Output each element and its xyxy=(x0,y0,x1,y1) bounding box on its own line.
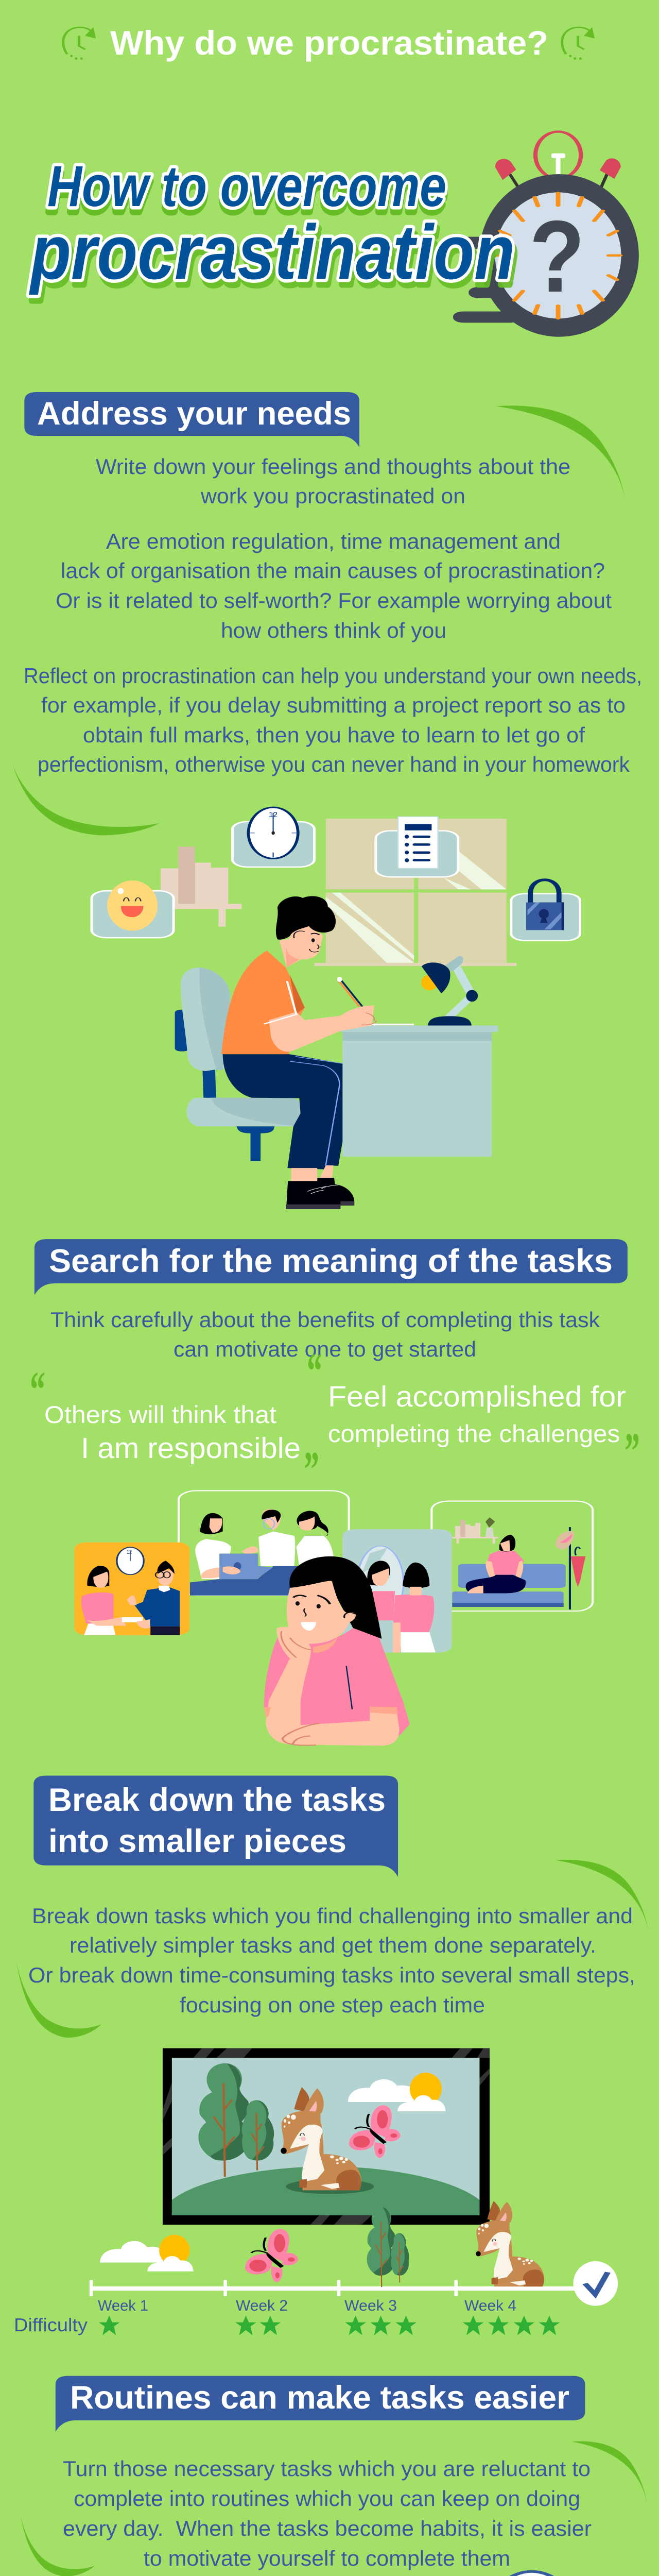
illustration: boy at desk with thoughts xyxy=(12,765,580,1209)
section: routines xyxy=(20,2376,647,2576)
bookshelf xyxy=(161,846,241,927)
heading: break down the tasks xyxy=(48,1782,386,1859)
card: happy emoji xyxy=(92,880,174,938)
quote: others will think: I am responsible xyxy=(81,1432,301,1465)
title: how to overcome procrastination: procrastination xyxy=(29,209,515,295)
text block: address needs paragraphs: obtain full marks, then you have to learn to let go of xyxy=(83,723,585,747)
swoosh: routines left xyxy=(20,2515,95,2576)
card: clock xyxy=(232,807,315,867)
swoosh: top right xyxy=(496,405,625,499)
difficulty stars xyxy=(99,2316,560,2335)
text block: address needs paragraphs: work you procrastinated on xyxy=(200,484,465,508)
text block: address needs paragraphs: lack of organisation the main causes of procrastination? xyxy=(61,558,605,583)
title: how to overcome procrastination: How to overcome xyxy=(47,154,446,218)
heading bubble: break down xyxy=(33,1775,398,1877)
title: how to overcome procrastination xyxy=(29,154,517,301)
header: why do we procrastinate xyxy=(63,24,595,62)
icon: completed check xyxy=(573,2261,618,2306)
quote: feel accomplished: “ xyxy=(307,1342,322,1399)
text block: routines body: every day. When the tasks become habits, it is easier xyxy=(63,2516,592,2540)
heading: why do we procrastinate: Why do we procrastinate? xyxy=(110,24,548,62)
text block: address needs paragraphs: perfectionism, otherwise you can never hand in your homework xyxy=(38,752,630,776)
icon: right timer xyxy=(562,27,595,60)
text block: address needs paragraphs xyxy=(24,454,642,776)
text block: break down body: relatively simpler tasks and get them done separately. xyxy=(70,1933,596,1957)
text block: address needs paragraphs: Write down your feelings and thoughts about the xyxy=(96,454,570,479)
frame: students with laptop xyxy=(179,1490,349,1596)
heading: routines: Routines can make tasks easier xyxy=(70,2380,569,2416)
card: document xyxy=(376,817,458,877)
boy xyxy=(221,896,376,1209)
text block: search body xyxy=(50,1308,600,1361)
title: how to overcome procrastination: How to overcome xyxy=(47,160,446,224)
heading bubble: address your needs xyxy=(24,392,359,447)
quote: others will think: “ xyxy=(30,1361,45,1418)
quote: feel accomplished: Feel accomplished for xyxy=(328,1380,626,1413)
quote: feel accomplished: ” xyxy=(625,1422,640,1480)
quote: feel accomplished xyxy=(307,1342,640,1480)
lamp xyxy=(421,956,478,1026)
text block: address needs paragraphs: Are emotion regulation, time management and xyxy=(106,529,561,553)
timeline labels xyxy=(14,2297,516,2335)
text block: address needs paragraphs: how others think of you xyxy=(221,618,446,642)
illustration: painting and timeline xyxy=(14,2048,618,2335)
section: address your needs xyxy=(24,392,642,776)
heading: address your needs: Address your needs xyxy=(37,396,351,432)
text block: address needs paragraphs: Or is it related to self-worth? For example worrying about xyxy=(56,588,612,613)
heading: break down the tasks: into smaller pieces xyxy=(48,1823,346,1859)
text block: address needs paragraphs: Reflect on procrastination can help you understand your own needs, xyxy=(24,664,642,688)
quote: others will think: Others will think that xyxy=(44,1401,276,1428)
text block: break down body: Break down tasks which you find challenging into smaller and xyxy=(32,1904,633,1928)
timeline labels: Week 3 xyxy=(344,2297,397,2314)
timeline labels: Week 2 xyxy=(236,2297,288,2314)
text block: routines body: Turn those necessary tasks which you are reluctant to xyxy=(63,2456,591,2481)
text block: search body: can motivate one to get started xyxy=(174,1337,476,1361)
swoosh: routines right xyxy=(571,2441,647,2505)
timeline pieces xyxy=(90,2201,581,2296)
quote: others will think: ” xyxy=(304,1441,319,1498)
timeline labels: Week 1 xyxy=(98,2297,148,2314)
heading: break down the tasks: Break down the tasks xyxy=(48,1782,386,1818)
icon: stopwatch with question mark: ? xyxy=(529,199,585,313)
icon: stopwatch with question mark xyxy=(453,131,639,337)
illustration: boy at desk with thoughts: 12 xyxy=(269,810,278,819)
card: lock xyxy=(511,880,580,941)
wall clock xyxy=(489,2571,574,2576)
swoosh: lower left xyxy=(12,765,160,835)
card: mirror with girl xyxy=(342,1529,452,1652)
text block: break down body: focusing on one step each time xyxy=(180,1993,485,2017)
section: break down the tasks xyxy=(16,1775,649,2038)
heading bubble: search xyxy=(34,1239,628,1295)
painting of deer xyxy=(163,2048,490,2225)
heading bubble: routines xyxy=(56,2376,585,2432)
title: how to overcome procrastination: procrastination xyxy=(31,214,517,301)
text block: break down body xyxy=(28,1904,635,2017)
desk xyxy=(340,1024,498,1157)
quote: feel accomplished: completing the challenges xyxy=(328,1420,620,1447)
text block: address needs paragraphs: for example, if you delay submitting a project report so as to xyxy=(41,693,626,717)
swoosh: break down left xyxy=(16,1960,101,2038)
chair xyxy=(175,968,302,1161)
card: girl and teacher xyxy=(74,1543,189,1635)
text block: break down body: Or break down time-consuming tasks into several small steps, xyxy=(28,1963,635,1987)
section: search for the meaning of the tasks xyxy=(30,1239,640,1498)
icon: left timer xyxy=(63,27,96,60)
text block: search body: Think carefully about the benefits of completing this task xyxy=(50,1308,600,1332)
timeline labels: Week 4 xyxy=(464,2297,516,2314)
swoosh: break down right xyxy=(556,1860,649,1932)
illustration: phone alarm and treadmill runner xyxy=(21,2571,630,2576)
frame: girl on sofa xyxy=(431,1501,593,1611)
illustration: imagined benefits and thoughtful girl xyxy=(74,1490,593,1745)
heading: search: Search for the meaning of the tasks xyxy=(49,1243,613,1279)
text block: routines body xyxy=(63,2456,592,2570)
illustration: imagined benefits and thoughtful girl: 12 xyxy=(127,1549,132,1555)
big girl thinking xyxy=(264,1556,410,1745)
timeline labels: Difficulty xyxy=(14,2314,88,2335)
window xyxy=(315,819,516,966)
text block: routines body: complete into routines which you can keep on doing xyxy=(74,2486,580,2511)
quote: others will think xyxy=(30,1361,319,1498)
text block: routines body: to motivate yourself to complete them xyxy=(144,2546,510,2570)
